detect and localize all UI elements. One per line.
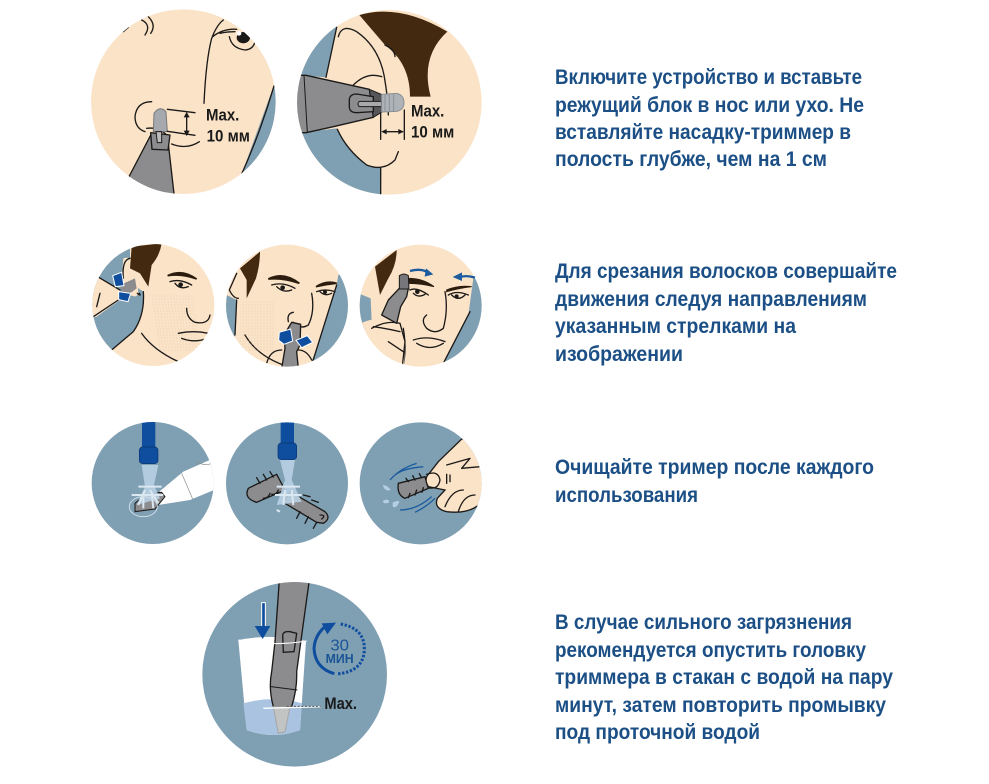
text block: step 2: движения следуя направлениям — [555, 288, 867, 311]
arrows: eyebrow direction — [410, 270, 475, 278]
row 2 illustrations: trimming motions — [90, 242, 485, 372]
dimension lines: ear — [381, 110, 404, 139]
illustration: rinse with device — [90, 420, 217, 547]
label: Max.: Max. — [324, 694, 357, 713]
max level line — [263, 707, 321, 708]
label: Max. 10 мм: 10 мм — [207, 127, 250, 146]
text block: step 4: рекомендуется опустить головку — [555, 639, 866, 662]
illustration: rinse removable head — [223, 420, 350, 547]
illustration: trimmer in glass of water — [200, 580, 390, 770]
timer: 30 мин — [314, 623, 364, 674]
text block: step 1: вставляйте насадку-триммер в — [555, 121, 851, 144]
text block: step 4: В случае сильного загрязнения — [555, 611, 852, 634]
text block: step 4: минут, затем повторить промывку — [555, 694, 886, 717]
illustration: trimmer in ear, max 10 mm — [297, 10, 482, 195]
arrow: down into glass — [255, 603, 270, 639]
text block: step 3: использования — [555, 484, 698, 507]
row 4 illustration: soak in glass — [200, 580, 390, 770]
timer: 30 мин: 30 — [330, 637, 349, 654]
text block: step 2: указанным стрелками на — [555, 315, 796, 338]
label: Max. 10 мм: Max. — [206, 106, 239, 125]
illustration: trimming eyebrow — [360, 244, 482, 367]
timer: 30 мин: МИН — [326, 652, 354, 666]
row 1 illustrations: nose and ear insertion depth — [90, 8, 487, 198]
label: Max. 10 мм (ear): 10 мм — [411, 122, 454, 141]
illustration: shake dry — [357, 420, 485, 547]
text block: step 2: изображении — [555, 343, 683, 366]
text block: step 1: режущий блок в нос или ухо. Не — [555, 94, 864, 117]
text block: step 4: под проточной водой — [555, 721, 760, 744]
illustration: trimming nose hair — [226, 244, 348, 367]
text block: step 1: полость глубже, чем на 1 см — [555, 148, 827, 171]
text block: step 2: Для срезания волосков совершайте — [555, 260, 897, 283]
text block: step 3: Очищайте тример после каждого — [555, 456, 874, 479]
label: Max. 10 мм (ear): Max. — [411, 102, 444, 121]
text block: step 4: триммера в стакан с водой на пару — [555, 666, 893, 689]
dimension lines: nose — [167, 109, 195, 135]
illustration: trimming ear hair — [90, 242, 217, 368]
row 3 illustrations: cleaning under water — [90, 420, 485, 547]
text block: step 1: Включите устройство и вставьте — [555, 66, 862, 89]
illustration: trimmer in nose, max 10 mm — [90, 8, 280, 197]
